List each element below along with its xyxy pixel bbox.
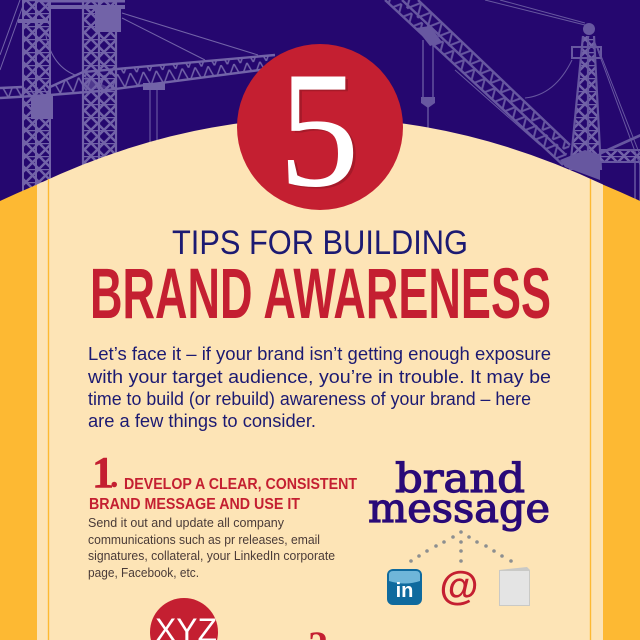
intro text: with your target audience, you’re in trouble. It may be (87, 367, 551, 387)
brand message wordmark: brand (395, 456, 525, 502)
tip 1 body text: signatures, collateral, your LinkedIn corporate (88, 549, 335, 563)
tip 1 body text: page, Facebook, etc. (88, 566, 199, 580)
dotted connectors (409, 530, 513, 563)
intro text (87, 344, 551, 431)
brand message wordmark (368, 456, 550, 532)
intro text: Let’s face it – if your brand isn’t getting enough exposure (88, 344, 551, 364)
background: night sky (0, 0, 640, 230)
hook block (423, 40, 433, 132)
tip 1 heading (89, 448, 357, 513)
crane boom (385, 0, 570, 165)
intro text: are a few things to consider. (88, 411, 316, 431)
cables and hoist lines (0, 0, 258, 143)
XYZ circle badge (150, 598, 218, 640)
tip 1 body text: communications such as pr releases, email (88, 533, 320, 547)
tip 1 heading: . (110, 458, 118, 495)
tip 1 heading: DEVELOP A CLEAR, CONSISTENT (124, 476, 357, 493)
icon: LinkedIn (387, 569, 422, 605)
tip 1 body text (88, 516, 335, 580)
tip 1 heading: BRAND MESSAGE AND USE IT (89, 496, 300, 513)
icon: LinkedIn: in (396, 580, 413, 602)
intro text: time to build (or rebuild) awareness of your brand – here (88, 389, 531, 409)
tip 1 body text: Send it out and update all company (88, 516, 285, 530)
icon: at sign: @ (439, 564, 479, 608)
numeral 5: 5 (279, 38, 359, 221)
title (90, 224, 551, 334)
tip 1 heading: 1 (92, 448, 114, 497)
crane jib (0, 55, 275, 98)
illustration: left tower cranes (0, 0, 275, 195)
red number badge (237, 38, 403, 223)
crane tower 2 (40, 0, 125, 170)
crane base and stays (560, 150, 600, 180)
crane tower 1 (18, 0, 53, 195)
crane mast (570, 23, 601, 170)
icon: folded brochure (499, 567, 530, 606)
brand message wordmark: message (368, 486, 550, 532)
illustration: right crawler crane (385, 0, 640, 205)
numeral 5: 5 (282, 40, 362, 223)
title: TIPS FOR BUILDING (172, 224, 468, 262)
